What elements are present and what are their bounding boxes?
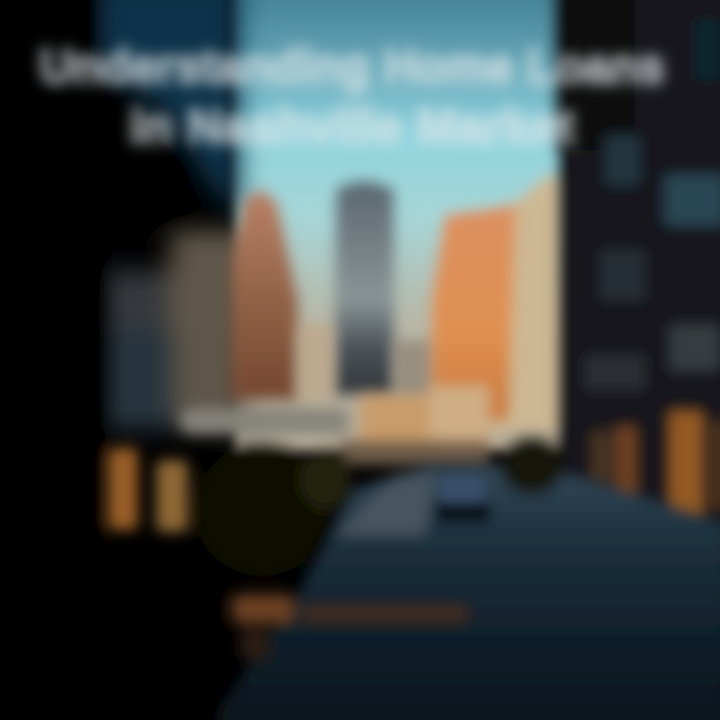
- right roadside trees: [502, 437, 562, 493]
- orange tower: [432, 205, 515, 420]
- brick tower: [232, 191, 298, 400]
- street level band of pale pavement and warm buildings: [180, 385, 490, 465]
- car on road: [436, 476, 490, 522]
- cream building right: [490, 175, 560, 430]
- left foreground silhouette and trees: [0, 0, 351, 720]
- right building lit shopfronts: [590, 410, 720, 520]
- orange road markings foreground: [232, 594, 470, 660]
- left mid-rise buildings: [105, 230, 245, 430]
- title: in Nashville Market: [130, 100, 574, 154]
- dark blue top-left corner sky: [95, 0, 240, 220]
- sky: [235, 0, 560, 450]
- title: [40, 40, 664, 154]
- right dark building facade: [555, 0, 720, 540]
- distant pale low buildings: [298, 325, 434, 400]
- glowing shop windows left: [108, 448, 188, 532]
- central grey skyscraper: [334, 181, 394, 395]
- title: Understanding Home Loans: [40, 40, 664, 94]
- road: [205, 465, 720, 720]
